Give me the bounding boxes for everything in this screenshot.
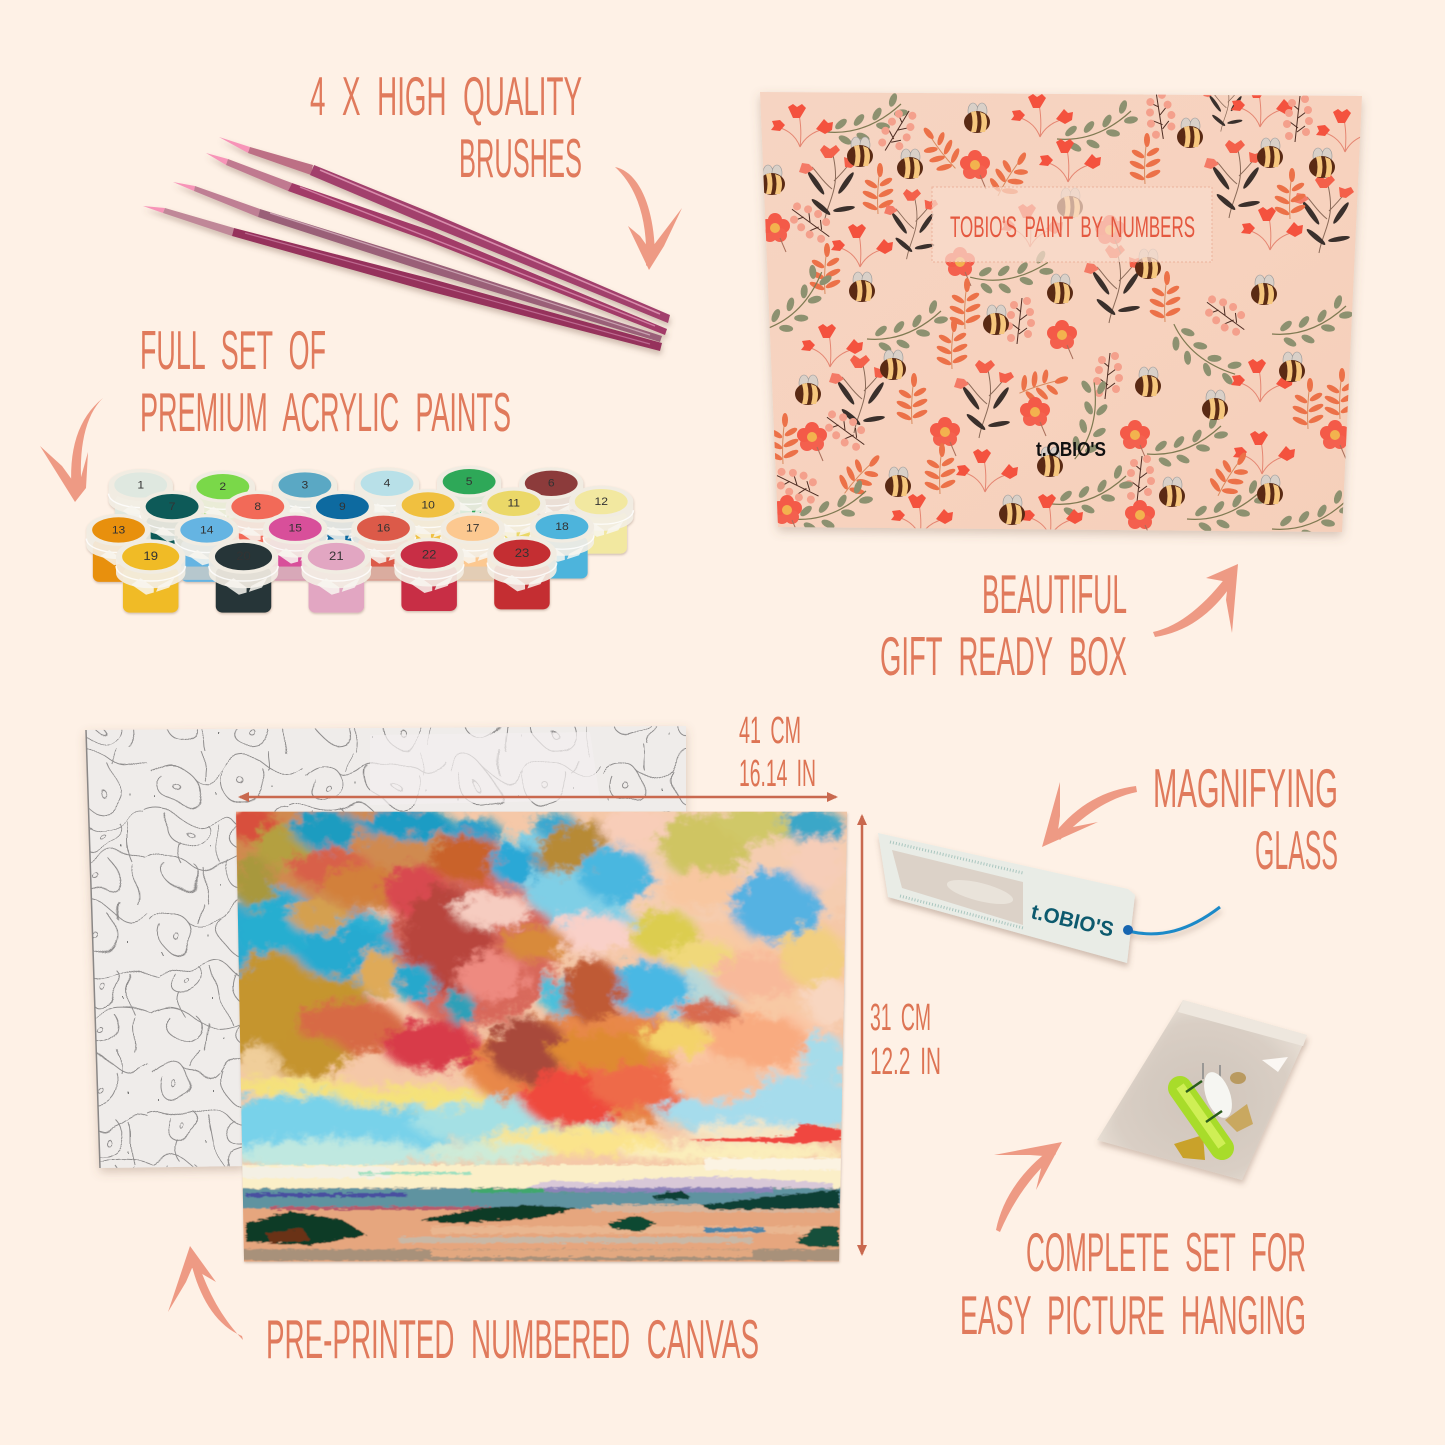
infographic: BRUSHES xyxy=(459,127,582,189)
pot row 3: 13 xyxy=(112,524,125,536)
infographic: PREMIUM ACRYLIC PAINTS xyxy=(140,381,511,443)
brush 2 xyxy=(206,153,667,335)
pot row 1: 2 xyxy=(219,480,226,493)
brass hangers xyxy=(1174,1072,1253,1160)
pot row 2: 9 xyxy=(339,500,346,513)
brush 1 xyxy=(219,137,670,323)
bees xyxy=(759,103,1335,525)
ribbon xyxy=(1123,907,1220,935)
label: paints xyxy=(140,319,511,443)
pot row 1 xyxy=(109,466,583,539)
box title plate: TOBIO'S PAINT BY NUMBERS xyxy=(950,211,1195,244)
pot row 3: 17 xyxy=(466,522,479,534)
pot row 2: 8 xyxy=(254,500,262,513)
pot row 1: 6 xyxy=(548,477,555,490)
infographic: BEAUTIFUL xyxy=(982,563,1127,625)
pot row 3: 14 xyxy=(200,524,214,536)
painted canvas xyxy=(235,812,848,1264)
dimension: width xyxy=(238,710,838,802)
box floral pattern xyxy=(763,93,1360,532)
pot row 1: 5 xyxy=(466,475,473,488)
brush 4 xyxy=(143,206,662,351)
horizon and land xyxy=(230,1123,860,1268)
dimension: height: 12.2 IN xyxy=(870,1041,941,1083)
pot row 4: 20 xyxy=(236,550,251,563)
pot row 4: 19 xyxy=(143,550,158,563)
pot row 2: 12 xyxy=(594,495,608,508)
paint pots set xyxy=(86,466,633,613)
arrow: to paints xyxy=(40,398,103,502)
dimension: width: 16.14 IN xyxy=(739,753,816,795)
pot row 2: 11 xyxy=(507,497,520,510)
pot row 4: 21 xyxy=(329,550,344,563)
label: paints: FULL SET OF xyxy=(140,319,326,381)
box logo: t.OBIO'S xyxy=(1036,439,1106,461)
ruler logo: t.OBIO'S xyxy=(1029,900,1116,942)
pot row 1: 4 xyxy=(384,477,391,490)
pot row 4: 23 xyxy=(515,546,529,560)
dimension: width: 41 CM xyxy=(739,710,801,752)
pot row 3 xyxy=(86,511,594,582)
brush 3 xyxy=(173,182,662,342)
label: brushes xyxy=(310,65,582,189)
hanging kit bag xyxy=(1097,1000,1307,1180)
pot row 1: 1 xyxy=(137,479,144,491)
label: brushes: 4 X HIGH QUALITY xyxy=(310,65,582,127)
arrow: to hanging kit xyxy=(994,1142,1062,1232)
pot row 3: 15 xyxy=(289,522,303,534)
label: magnifying glass xyxy=(1153,757,1338,881)
white hooks xyxy=(1199,1063,1237,1122)
dimension: height xyxy=(857,814,941,1256)
pot row 4 xyxy=(116,536,557,613)
arrow: to canvas xyxy=(168,1246,243,1340)
pot row 4: 22 xyxy=(422,548,436,561)
pot row 3: 16 xyxy=(377,522,390,534)
magnifying ruler card xyxy=(878,833,1220,963)
sky brush blobs xyxy=(236,812,847,1166)
pot row 3: 18 xyxy=(555,520,569,533)
label: canvas: PRE-PRINTED NUMBERED CANVAS xyxy=(266,1308,759,1370)
numbered blank canvas xyxy=(82,726,690,1176)
label: hanging kit xyxy=(960,1221,1306,1346)
pot row 2: 10 xyxy=(421,499,435,511)
pot row 1: 3 xyxy=(302,479,308,491)
infographic: GLASS xyxy=(1255,819,1338,881)
spirit level xyxy=(1180,1081,1222,1148)
icon: four paint brushes xyxy=(143,137,670,351)
gift box xyxy=(750,77,1378,544)
arrow: to gift box xyxy=(1153,564,1238,637)
arrow: to magnifying glass xyxy=(1042,782,1137,847)
infographic: GIFT READY BOX xyxy=(880,625,1127,687)
arrow: to brushes xyxy=(615,167,682,270)
box title plate xyxy=(932,187,1212,262)
label: gift box xyxy=(880,563,1127,687)
dimension: height: 31 CM xyxy=(870,997,931,1039)
pot row 2: 7 xyxy=(169,500,175,513)
pot row 2 xyxy=(140,486,633,559)
